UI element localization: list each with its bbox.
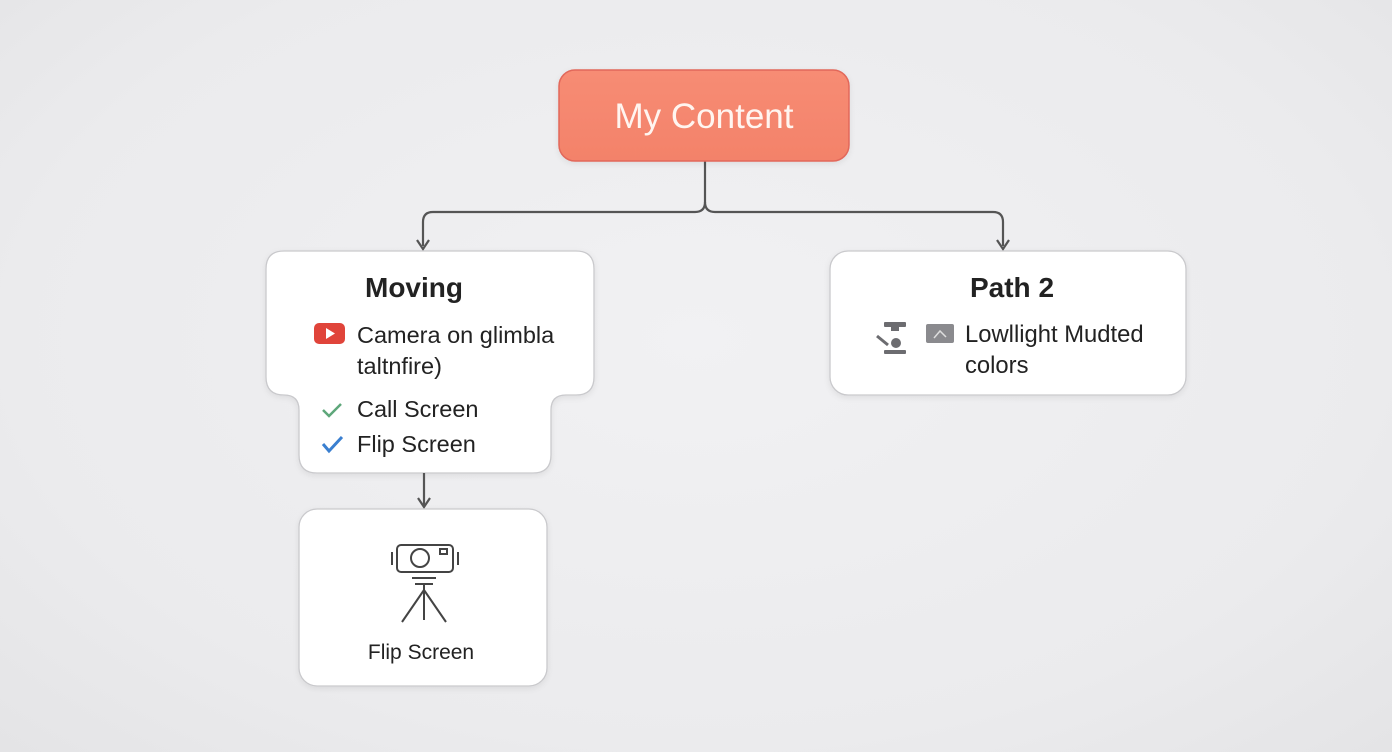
icon: camera on tripod bbox=[392, 545, 458, 622]
icon: video play bbox=[314, 323, 345, 344]
connector: root to branches bbox=[417, 161, 1009, 249]
panel: Flip Screen bbox=[299, 509, 547, 686]
panel: Moving: Camera on glimbla bbox=[357, 322, 555, 348]
panel: Moving: taltnfire) bbox=[357, 353, 442, 379]
icon: gimbal bbox=[877, 322, 906, 354]
icon: blue check bbox=[323, 437, 342, 451]
title box: My Content bbox=[559, 70, 849, 161]
title box: My Content: My Content bbox=[615, 97, 794, 136]
panel: Moving: Flip Screen bbox=[357, 431, 476, 457]
panel: Path 2 bbox=[830, 251, 1186, 395]
panel: Path 2: Path 2 bbox=[970, 272, 1054, 303]
icon: green check bbox=[323, 404, 341, 416]
panel: Moving: Call Screen bbox=[357, 396, 478, 422]
panel: Path 2: colors bbox=[965, 352, 1029, 379]
arrow: Moving to Flip Screen bbox=[418, 473, 430, 507]
panel: Path 2: Lowllight Mudted bbox=[965, 321, 1144, 348]
panel: Moving bbox=[266, 251, 594, 473]
panel: Flip Screen: Flip Screen bbox=[368, 641, 474, 664]
panel: Moving: Moving bbox=[365, 272, 463, 303]
icon: image bbox=[926, 324, 954, 343]
